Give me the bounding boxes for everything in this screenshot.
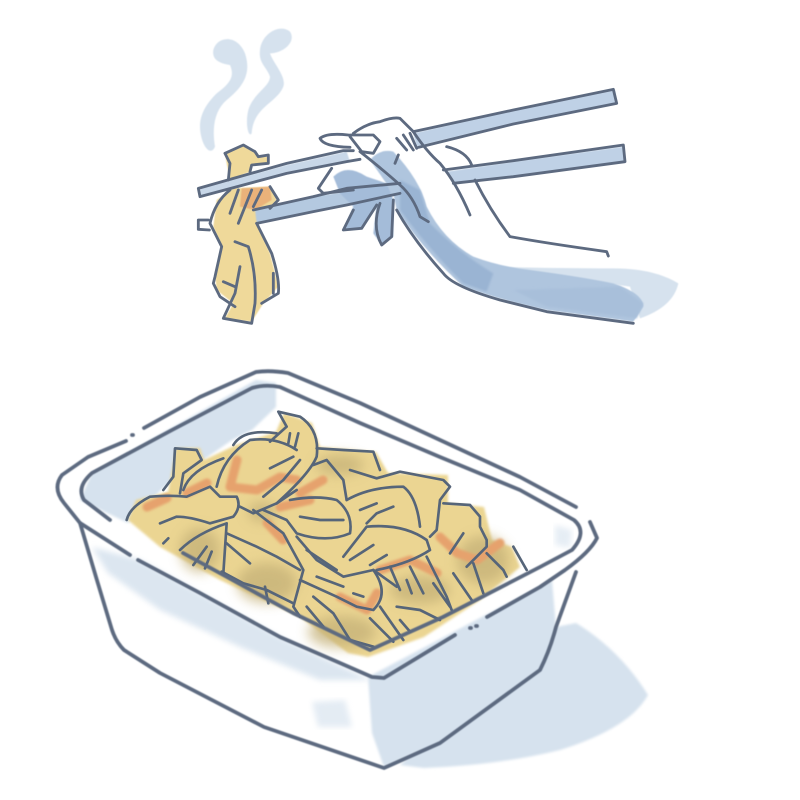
- noodles in container: [127, 412, 527, 657]
- noodle base: [128, 413, 520, 657]
- noodle orange tint: [240, 187, 272, 210]
- shade front right wall: [368, 580, 556, 767]
- ink lines: [198, 89, 633, 323]
- shade inside back left: [80, 380, 276, 523]
- olive shadows: [180, 455, 509, 648]
- container outline: [57, 371, 597, 768]
- lifted noodle fill: [213, 145, 278, 322]
- outer rim left: [57, 441, 130, 555]
- arm pale shadow: [490, 267, 678, 318]
- container washes: [80, 380, 648, 768]
- inner rim: [81, 386, 581, 650]
- lower chopstick: [443, 145, 625, 183]
- small patch: [312, 700, 352, 727]
- arm darker shading: [400, 180, 493, 292]
- hand outline: [353, 118, 470, 215]
- chopstick fills: [200, 90, 625, 245]
- container body: [80, 523, 576, 768]
- outer rim back: [144, 371, 576, 507]
- table shadow: [400, 623, 648, 768]
- outer rim front: [138, 560, 455, 678]
- chopsticks and hand scene: [198, 29, 678, 323]
- icon: steam: [200, 29, 292, 151]
- shade front wall: [92, 547, 372, 680]
- lifted noodle lines: [225, 145, 268, 172]
- orange sauce: [147, 460, 500, 610]
- arm and hand blue shading: [370, 151, 643, 322]
- upper chopstick: [198, 151, 360, 197]
- noodle strokes: [127, 412, 527, 647]
- rim dots: [132, 435, 477, 628]
- outer rim right: [487, 522, 597, 617]
